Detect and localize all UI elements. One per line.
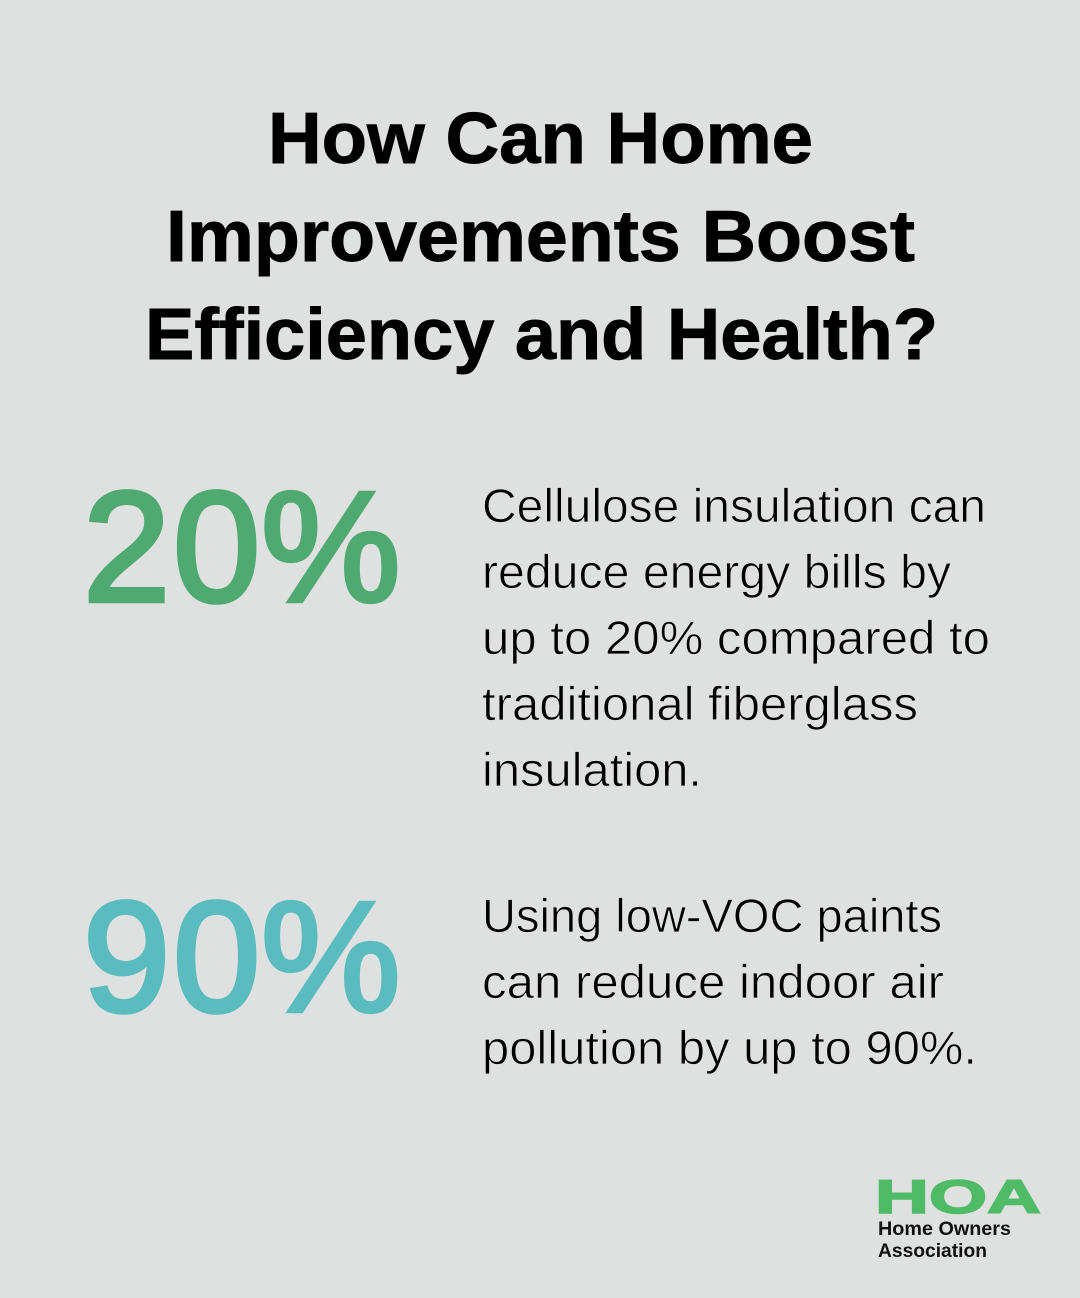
- text block: low-VOC paints description: [482, 890, 977, 1075]
- text block: cellulose insulation description: traditional fiberglass: [482, 678, 918, 731]
- logo: HOA Home Owners Association: [875, 1170, 1041, 1262]
- logo: HOA Home Owners Association: Home Owners: [878, 1219, 1011, 1240]
- text block: cellulose insulation description: up to 20% compared to: [482, 612, 990, 665]
- logo: HOA Home Owners Association: HOA: [875, 1170, 1041, 1223]
- text block: cellulose insulation description: reduce energy bills by: [482, 546, 951, 599]
- text block: low-VOC paints description: pollution by up to 90%.: [482, 1022, 977, 1075]
- text block: cellulose insulation description: Cellulose insulation can: [482, 480, 986, 533]
- text block: low-VOC paints description: can reduce indoor air: [482, 956, 944, 1009]
- text block: cellulose insulation description: insulation.: [482, 744, 702, 797]
- text block: low-VOC paints description: Using low-VOC paints: [482, 890, 942, 943]
- title: [145, 99, 938, 375]
- stat: 20% cellulose insulation: [83, 460, 990, 797]
- stat: 90% low-VOC paints: [83, 870, 977, 1075]
- big number: 20%: 20%: [83, 460, 401, 635]
- big number: 90%: 90%: [83, 870, 401, 1045]
- text block: cellulose insulation description: [482, 480, 990, 797]
- logo: HOA Home Owners Association: Association: [878, 1241, 987, 1262]
- title: How Can Home: [268, 99, 813, 179]
- title: Improvements Boost: [166, 197, 915, 277]
- title: Efficiency and Health?: [145, 295, 938, 375]
